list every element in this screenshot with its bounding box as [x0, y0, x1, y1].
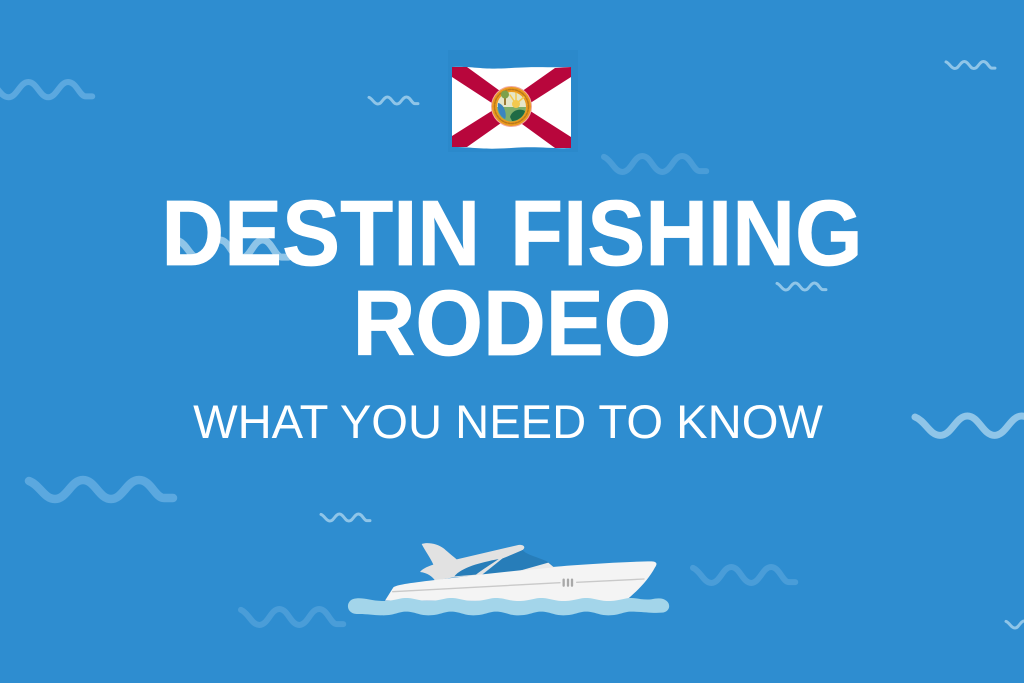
yacht hull [385, 561, 656, 601]
wave: small top right [946, 62, 995, 69]
yacht side window [454, 559, 499, 576]
wave: top left [0, 82, 92, 97]
title: RODEO [353, 271, 671, 375]
title [161, 181, 863, 375]
icon: Florida flag [448, 50, 578, 152]
illustration: yacht on water [348, 543, 669, 615]
wave: small right of title [777, 283, 826, 290]
wave: right edge [915, 416, 1024, 435]
wave: behind title [179, 240, 288, 258]
wave: small top [369, 97, 418, 104]
flag seal [491, 86, 532, 127]
wave: right of boat [693, 567, 795, 583]
title: DESTIN FISHING [161, 181, 863, 285]
wave: under flag [604, 156, 706, 172]
wave: bottom left [241, 609, 343, 625]
wave: bottom right corner [1006, 621, 1024, 628]
yacht hull stripe [393, 579, 644, 592]
yacht vents [564, 580, 572, 586]
yacht windshield [483, 550, 555, 574]
subtitle: WHAT YOU NEED TO KNOW [193, 396, 823, 449]
wave: large left [29, 480, 173, 499]
water under yacht [348, 598, 669, 615]
wave: small above boat [321, 514, 370, 521]
yacht arch and fin [420, 543, 524, 581]
